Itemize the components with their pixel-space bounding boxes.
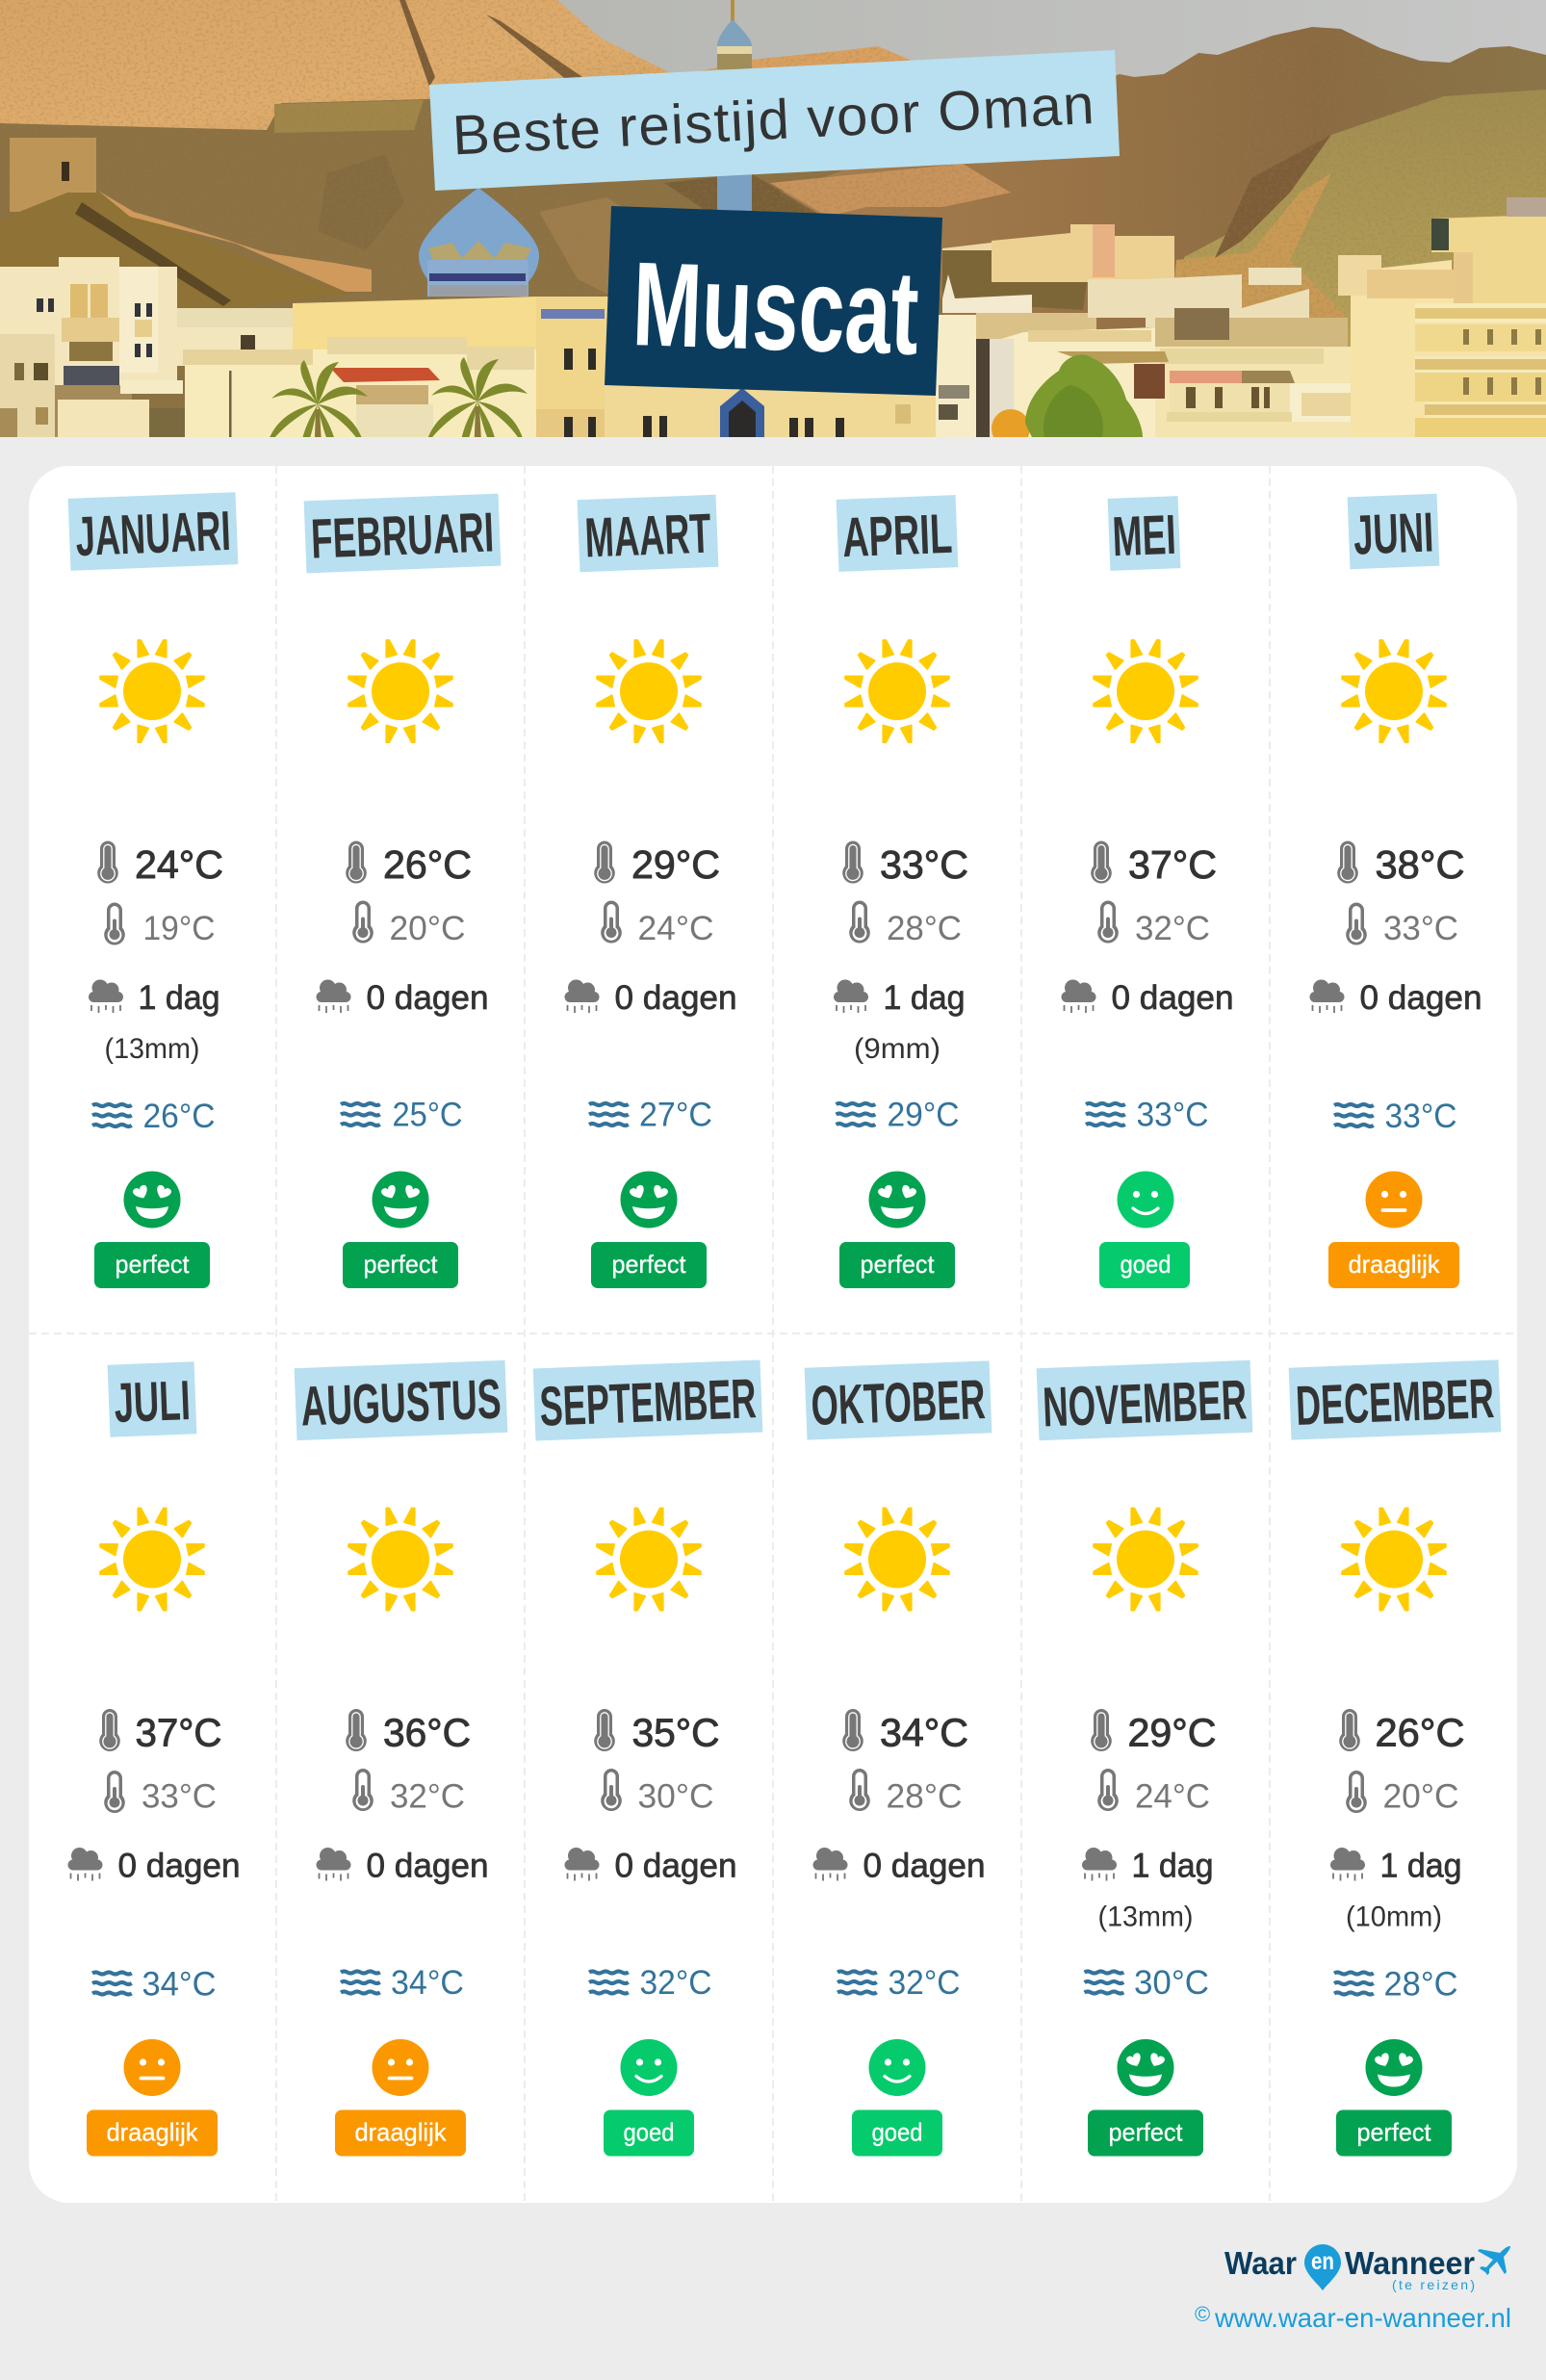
max temperature: 29°C — [1128, 1710, 1217, 1754]
rainfall: (10mm) — [1346, 1901, 1442, 1933]
min temperature — [849, 1769, 963, 1816]
rating smiley — [123, 2039, 181, 2096]
rating badge: perfect — [612, 1250, 686, 1279]
logo: Waar en Wanneer — [1224, 2244, 1510, 2292]
icon: sun — [1094, 1508, 1198, 1610]
month label — [295, 1360, 507, 1440]
icon: sun — [1342, 1508, 1446, 1610]
rating badge: perfect — [1357, 2118, 1431, 2147]
rating badge — [591, 1242, 707, 1288]
month label: OKTOBER — [810, 1368, 987, 1437]
month: juli — [67, 1361, 241, 2157]
icon: map pin — [1304, 2244, 1341, 2290]
rating badge — [335, 2110, 466, 2157]
month: augustus — [295, 1360, 507, 2157]
rain days — [1082, 1847, 1213, 1885]
sea temperature: 34°C — [142, 1966, 216, 2003]
sea temperature: 28°C — [1384, 1966, 1457, 2003]
max temperature: 38°C — [1375, 842, 1465, 887]
rating badge — [604, 2110, 694, 2157]
sea temperature — [341, 1964, 464, 2002]
icon: airplane — [1478, 2246, 1510, 2275]
min temperature — [601, 901, 714, 947]
min temperature: 30°C — [637, 1777, 714, 1816]
city banner: Muscat — [631, 238, 921, 380]
rain days: 0 dagen — [614, 979, 737, 1017]
sea temperature: 29°C — [888, 1096, 959, 1134]
min temperature: 20°C — [1382, 1777, 1459, 1816]
month label: JULI — [113, 1369, 192, 1435]
min temperature — [352, 1769, 465, 1816]
rating badge — [839, 1242, 955, 1288]
sea temperature: 25°C — [393, 1096, 462, 1134]
rain days — [834, 979, 965, 1017]
sea temperature — [836, 1096, 959, 1134]
rating badge — [1328, 1242, 1459, 1288]
month label: FEBRUARI — [310, 501, 495, 571]
max temperature — [842, 1709, 968, 1754]
rating badge — [1336, 2110, 1452, 2157]
logo: Waar en Wanneer: Wanneer — [1345, 2245, 1475, 2281]
rain days: 0 dagen — [117, 1847, 241, 1885]
month: februari — [304, 494, 501, 1288]
hero photo: Muscat skyline — [0, 0, 1546, 462]
min temperature — [1097, 1769, 1210, 1816]
max temperature — [1339, 1709, 1465, 1754]
min temperature — [601, 1769, 714, 1816]
rating smiley — [123, 1171, 181, 1229]
max temperature: 37°C — [1128, 842, 1217, 887]
max temperature: 26°C — [383, 842, 472, 887]
rain days: 0 dagen — [1359, 979, 1482, 1017]
rating smiley — [1117, 2039, 1174, 2096]
rating badge: draaglijk — [106, 2118, 198, 2147]
rain days: 1 dag — [139, 979, 219, 1017]
month label — [1037, 1360, 1252, 1440]
month label — [304, 494, 501, 573]
sea temperature — [92, 1966, 216, 2003]
sea temperature — [1334, 1098, 1457, 1135]
sea temperature: 33°C — [1136, 1096, 1209, 1134]
min temperature — [104, 1771, 217, 1816]
rating badge: goed — [624, 2118, 674, 2147]
rating badge — [852, 2110, 942, 2157]
rain days: 0 dagen — [614, 1847, 737, 1885]
rating badge: goed — [872, 2118, 922, 2147]
icon: sun — [845, 640, 949, 742]
title banner — [429, 50, 1120, 191]
sea temperature — [341, 1096, 462, 1134]
rating badge — [1099, 1242, 1190, 1288]
month label — [805, 1360, 992, 1440]
max temperature: 33°C — [880, 842, 968, 887]
icon: sun — [100, 640, 204, 742]
title banner: Beste reistijd voor Oman — [451, 73, 1095, 167]
sea temperature: 33°C — [1384, 1098, 1457, 1135]
rain days: 0 dagen — [1111, 979, 1234, 1017]
sea temperature: 32°C — [888, 1964, 961, 2002]
rating smiley — [868, 1171, 926, 1229]
sea temperature — [92, 1098, 216, 1135]
min temperature: 32°C — [390, 1777, 465, 1816]
rating smiley — [372, 1171, 429, 1229]
month: november — [1037, 1360, 1252, 2157]
min temperature: 32°C — [1135, 910, 1210, 947]
rating badge: goed — [1121, 1250, 1171, 1279]
month label: SEPTEMBER — [538, 1367, 758, 1438]
month: mei — [1061, 496, 1234, 1288]
month label: JUNI — [1353, 501, 1434, 567]
month: december — [1289, 1359, 1501, 2157]
rating badge — [87, 2110, 218, 2157]
min temperature — [104, 903, 216, 947]
max temperature — [346, 1709, 471, 1754]
icon: sun — [1342, 640, 1446, 742]
min temperature — [352, 901, 466, 947]
logo: Waar en Wanneer: (te reizen) — [1392, 2277, 1475, 2292]
min temperature: 24°C — [1135, 1777, 1210, 1816]
sea temperature — [1086, 1096, 1209, 1134]
max temperature: 37°C — [135, 1710, 221, 1754]
max temperature — [1337, 841, 1465, 887]
min temperature: 19°C — [142, 910, 216, 947]
month: maart — [564, 495, 737, 1288]
month label: JANUARI — [74, 500, 232, 568]
month label: MAART — [583, 503, 712, 569]
mountain texture — [0, 0, 1350, 326]
icon: sun — [100, 1508, 204, 1610]
buildings right — [936, 197, 1546, 448]
sea temperature: 26°C — [142, 1098, 216, 1135]
icon: sun — [597, 640, 701, 742]
sea temperature: 34°C — [391, 1964, 464, 2002]
min temperature: 24°C — [637, 910, 714, 947]
max temperature — [594, 841, 720, 887]
min temperature — [1346, 903, 1458, 947]
rain days: 0 dagen — [863, 1847, 986, 1885]
rating badge — [1088, 2110, 1203, 2157]
max temperature — [1091, 1709, 1217, 1754]
rain days — [1330, 1847, 1461, 1885]
copyright url: © — [1195, 2302, 1210, 2326]
icon: sun — [348, 1508, 452, 1610]
sea temperature: 27°C — [639, 1096, 712, 1134]
rainfall: (13mm) — [104, 1033, 200, 1065]
sea temperature — [1334, 1966, 1457, 2003]
max temperature — [842, 841, 968, 887]
month label — [68, 492, 238, 571]
month: april — [834, 495, 968, 1288]
max temperature — [1091, 841, 1217, 887]
min temperature: 33°C — [142, 1777, 217, 1816]
max temperature — [97, 841, 223, 887]
rating smiley — [620, 2039, 678, 2096]
rating badge: perfect — [1109, 2118, 1183, 2147]
min temperature: 28°C — [887, 910, 962, 947]
max temperature: 34°C — [880, 1710, 968, 1754]
month: oktober — [805, 1360, 992, 2157]
icon: sun — [597, 1508, 701, 1610]
rating smiley — [868, 2039, 926, 2096]
city banner — [605, 206, 942, 396]
max temperature — [346, 841, 472, 887]
max temperature: 29°C — [631, 842, 720, 887]
buildings left — [0, 257, 608, 437]
month label: APRIL — [841, 503, 953, 569]
rating badge — [343, 1242, 458, 1288]
rating badge: perfect — [116, 1250, 190, 1279]
min temperature — [1097, 901, 1210, 947]
rainfall: (13mm) — [1097, 1901, 1194, 1933]
sea temperature: 32°C — [639, 1964, 712, 2002]
rating smiley — [1117, 1171, 1174, 1229]
panel: climate table — [29, 466, 1517, 2203]
rain days: 0 dagen — [366, 1847, 489, 1885]
sea temperature: 30°C — [1134, 1964, 1209, 2002]
month label — [108, 1361, 196, 1437]
building under city banner — [605, 375, 941, 437]
min temperature: 28°C — [886, 1777, 963, 1816]
icon: sun — [1094, 640, 1198, 742]
sea temperature — [1084, 1964, 1209, 2002]
rating badge: draaglijk — [354, 2118, 447, 2147]
rating badge: draaglijk — [1348, 1250, 1440, 1279]
dome — [419, 188, 539, 297]
rainfall: (9mm) — [854, 1033, 940, 1065]
max temperature — [594, 1709, 720, 1754]
rain days: 1 dag — [1380, 1847, 1461, 1885]
minaret — [717, 0, 752, 212]
rain days: 0 dagen — [366, 979, 489, 1017]
logo: Waar en Wanneer: en — [1311, 2248, 1334, 2275]
rain days: 1 dag — [1132, 1847, 1213, 1885]
month: januari — [68, 492, 238, 1288]
rating badge: perfect — [364, 1250, 438, 1279]
max temperature: 36°C — [383, 1710, 471, 1754]
max temperature: 26°C — [1375, 1710, 1465, 1754]
max temperature: 35°C — [631, 1710, 720, 1754]
sea temperature — [589, 1964, 712, 2002]
month: juni — [1309, 494, 1482, 1288]
min temperature: 33°C — [1383, 910, 1458, 947]
rating badge: perfect — [861, 1250, 935, 1279]
month label: MEI — [1111, 504, 1177, 568]
max temperature — [99, 1709, 221, 1754]
rain days — [89, 979, 219, 1017]
min temperature: 20°C — [389, 910, 466, 947]
icon: sun — [845, 1508, 949, 1610]
logo: Waar en Wanneer: Waar — [1224, 2245, 1297, 2281]
max temperature: 24°C — [135, 842, 223, 887]
rating smiley — [1365, 1171, 1423, 1229]
month label — [1108, 496, 1180, 571]
min temperature — [1346, 1771, 1459, 1816]
icon: sun — [348, 640, 452, 742]
month label — [837, 495, 958, 572]
sea temperature — [589, 1096, 712, 1134]
rating badge — [94, 1242, 210, 1288]
month label — [533, 1359, 762, 1441]
month label — [1348, 494, 1439, 569]
copyright url: www.waar-en-wanneer.nl — [1214, 2303, 1511, 2333]
rating smiley — [372, 2039, 429, 2096]
rating smiley — [1365, 2039, 1423, 2096]
rain days: 1 dag — [884, 979, 965, 1017]
sea temperature — [837, 1964, 961, 2002]
month label: NOVEMBER — [1042, 1368, 1248, 1439]
month label — [578, 495, 718, 572]
rating smiley — [620, 1171, 678, 1229]
min temperature — [849, 901, 962, 947]
month label: AUGUSTUS — [299, 1368, 502, 1437]
month: september — [533, 1359, 762, 2157]
